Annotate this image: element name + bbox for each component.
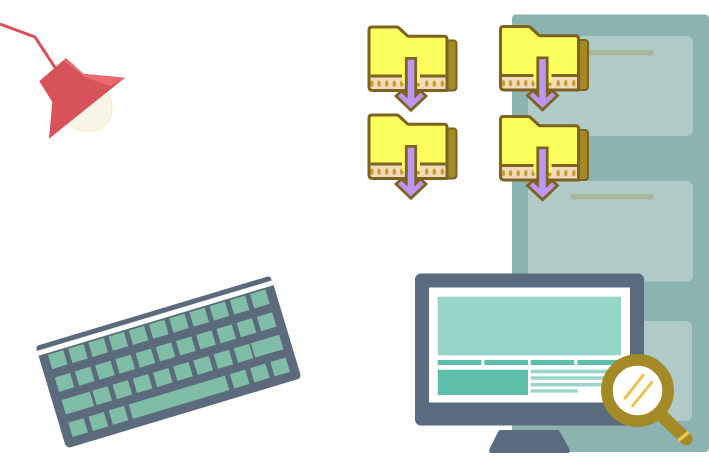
folder icon: top right [500,26,588,110]
filing cabinet [512,14,709,452]
magnifier lens [607,360,668,421]
lamp shade [39,58,125,139]
light bulb [64,84,112,132]
folder icon: bottom right [500,116,588,200]
screen text lines [531,370,621,393]
monitor frame [415,274,644,426]
magnifier handle band [678,432,689,441]
drawer 3 [528,321,692,421]
monitor stand [489,430,570,453]
drawer 2 handle [570,194,654,200]
icon: magnifying glass [607,360,689,441]
monitor screen [429,288,630,402]
drawer 2 [528,181,693,282]
keys [48,289,290,437]
lamp shade highlight [64,58,125,86]
folder icon: bottom left [369,115,456,198]
lamp cord [0,24,56,69]
magnifier handle [660,414,686,439]
keyboard [36,276,302,449]
screen hero block [438,297,621,355]
drawer 1 handle [570,50,654,56]
drawer 1 [528,36,693,136]
desk lamp [0,24,125,139]
keyboard body [38,285,302,449]
keyboard top strip [36,276,272,351]
monitor [415,274,644,453]
folder icon: top left [369,27,456,110]
screen content block [438,370,528,395]
screen nav bars [438,360,621,365]
lens glints [625,375,652,406]
